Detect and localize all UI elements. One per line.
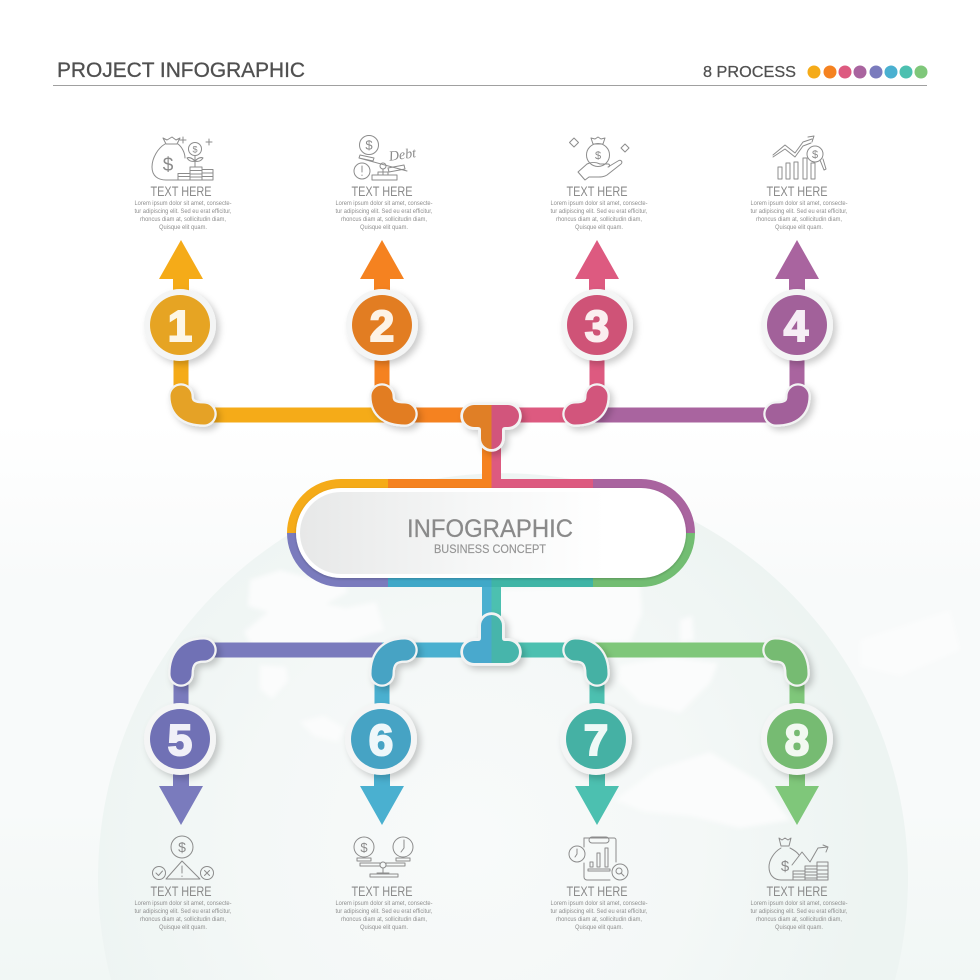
text block 5: tur adipiscing elit. Sed eu erat efficitur, xyxy=(134,908,232,915)
icon: money bag and coins: $ xyxy=(192,144,198,154)
text block 2: rhoncus diam at, sollicitudin diam, xyxy=(341,216,427,223)
text block 5: Quisque elit quam. xyxy=(159,924,207,931)
elbow 7 xyxy=(575,650,597,674)
badge 3 xyxy=(561,289,633,361)
badge 8 xyxy=(761,703,833,775)
text block 8: Lorem ipsum dolor sit amet, consecte- xyxy=(750,900,848,907)
elbow 3 xyxy=(575,396,597,414)
arrow 4 xyxy=(775,240,819,292)
text block 7: Quisque elit quam. xyxy=(575,924,623,931)
badge 2: 2 xyxy=(370,302,394,351)
badge 6: 6 xyxy=(369,716,393,765)
badge 2 xyxy=(346,289,418,361)
badge 5 xyxy=(144,703,216,775)
badge 8: 8 xyxy=(785,716,809,765)
text block 3: Lorem ipsum dolor sit amet, consecte- xyxy=(550,200,648,207)
text block 7: Lorem ipsum dolor sit amet, consecte- xyxy=(550,900,648,907)
arrow 7 xyxy=(575,770,619,825)
text block 5: Lorem ipsum dolor sit amet, consecte- xyxy=(134,900,232,907)
central trunk stems xyxy=(482,445,501,617)
bottom T connector xyxy=(463,615,519,663)
text block 8: TEXT HERE xyxy=(766,883,828,899)
arrow 6 xyxy=(360,770,404,825)
pill outline xyxy=(296,488,686,578)
elbow joints xyxy=(181,396,798,674)
text block 6: TEXT HERE xyxy=(352,883,412,899)
title: PROJECT INFOGRAPHIC xyxy=(57,58,305,82)
text block 5 xyxy=(134,883,232,931)
text block 3 xyxy=(550,183,648,231)
icon: money and time scale: $ xyxy=(360,840,368,855)
pill coloured ribbon xyxy=(292,484,690,582)
badge 3: 3 xyxy=(585,302,609,351)
icon: debt scale: Debt xyxy=(387,146,418,165)
text block 7 xyxy=(550,883,648,931)
text block 1: TEXT HERE xyxy=(150,183,212,199)
text block 6: Quisque elit quam. xyxy=(360,924,408,931)
icon: growth chart with magnifier: $ xyxy=(812,149,818,161)
text block 2 xyxy=(336,183,433,231)
badge 6 xyxy=(345,703,417,775)
elbow 1 xyxy=(181,396,204,414)
text block 4: Quisque elit quam. xyxy=(775,224,823,231)
icon: growth chart with magnifier xyxy=(773,136,826,179)
elbow 6 xyxy=(382,650,405,674)
text block 3: tur adipiscing elit. Sed eu erat efficitur, xyxy=(550,208,648,215)
text block 7: TEXT HERE xyxy=(566,883,628,899)
arrow 8 xyxy=(775,770,819,825)
elbow 8 xyxy=(775,650,797,674)
text block 4: Lorem ipsum dolor sit amet, consecte- xyxy=(750,200,848,207)
text block 7: tur adipiscing elit. Sed eu erat efficitur, xyxy=(550,908,648,915)
top T connector xyxy=(463,405,519,449)
text block 1: Quisque elit quam. xyxy=(159,224,207,231)
text block 8 xyxy=(750,883,848,931)
icon: money and time scale xyxy=(354,837,413,877)
badge 1: 1 xyxy=(168,302,192,351)
elbow 2 xyxy=(382,396,405,414)
text block 1: rhoncus diam at, sollicitudin diam, xyxy=(140,216,226,223)
icon: money bag growth: $ xyxy=(781,858,790,875)
number badges xyxy=(144,289,833,775)
text block 4: rhoncus diam at, sollicitudin diam, xyxy=(756,216,842,223)
elbow 4 xyxy=(776,396,798,414)
badge 4: 4 xyxy=(784,302,809,351)
icon: debt scale: $ xyxy=(365,138,373,152)
text block 3: Quisque elit quam. xyxy=(575,224,623,231)
text block 2: Quisque elit quam. xyxy=(360,224,408,231)
icon: money bag growth xyxy=(769,838,828,880)
pill body xyxy=(300,492,682,574)
colour legend dots xyxy=(808,66,928,78)
text block 8: tur adipiscing elit. Sed eu erat efficitur, xyxy=(750,908,848,915)
pill heading: INFOGRAPHIC xyxy=(407,515,573,543)
text block 6 xyxy=(336,883,433,931)
text block 2: Lorem ipsum dolor sit amet, consecte- xyxy=(336,200,432,207)
icon: debt scale xyxy=(354,136,418,180)
text block 4: TEXT HERE xyxy=(766,183,828,199)
text block 3: rhoncus diam at, sollicitudin diam, xyxy=(556,216,642,223)
text block 8: rhoncus diam at, sollicitudin diam, xyxy=(756,916,842,923)
text block 6: tur adipiscing elit. Sed eu erat efficitur, xyxy=(336,908,433,915)
badge 5: 5 xyxy=(168,716,192,765)
text block 5: rhoncus diam at, sollicitudin diam, xyxy=(140,916,226,923)
badge 1 xyxy=(144,289,216,361)
badge 4 xyxy=(761,289,833,361)
icon: money bag and coins: $ xyxy=(163,155,174,176)
badge 7 xyxy=(560,703,632,775)
text block 6: Lorem ipsum dolor sit amet, consecte- xyxy=(336,900,432,907)
arrows up xyxy=(159,240,819,292)
text block 6: rhoncus diam at, sollicitudin diam, xyxy=(341,916,427,923)
header xyxy=(53,58,928,86)
arrow 1 xyxy=(159,240,203,292)
text block 1 xyxy=(134,183,232,231)
icon: hand holding money bag xyxy=(570,137,629,180)
pill subheading: BUSINESS CONCEPT xyxy=(434,544,546,556)
icon: money bag and coins xyxy=(152,137,213,180)
icon: clipboard report xyxy=(569,837,628,880)
text block 7: rhoncus diam at, sollicitudin diam, xyxy=(556,916,642,923)
arrows down xyxy=(159,770,819,825)
arrow 3 xyxy=(575,240,619,292)
text block 4: tur adipiscing elit. Sed eu erat efficitur, xyxy=(750,208,848,215)
connector lines xyxy=(181,360,797,710)
icon: hand holding money bag: $ xyxy=(595,150,601,162)
central pill xyxy=(292,484,690,582)
elbow 5 xyxy=(181,650,204,674)
text block 3: TEXT HERE xyxy=(566,183,628,199)
text block 8: Quisque elit quam. xyxy=(775,924,823,931)
icon: risk warning: $ xyxy=(178,839,186,855)
subtitle: 8 process: 8 PROCESS xyxy=(703,64,796,81)
text block 1: tur adipiscing elit. Sed eu erat efficitur, xyxy=(134,208,232,215)
badge 7: 7 xyxy=(584,716,608,765)
icon: risk warning xyxy=(152,836,214,880)
text block 1: Lorem ipsum dolor sit amet, consecte- xyxy=(134,200,232,207)
text block 5: TEXT HERE xyxy=(150,883,212,899)
text block 2: TEXT HERE xyxy=(352,183,412,199)
arrow 2 xyxy=(360,240,404,292)
arrow 5 xyxy=(159,770,203,825)
text block 2: tur adipiscing elit. Sed eu erat efficitur, xyxy=(336,208,433,215)
text block 4 xyxy=(750,183,848,231)
